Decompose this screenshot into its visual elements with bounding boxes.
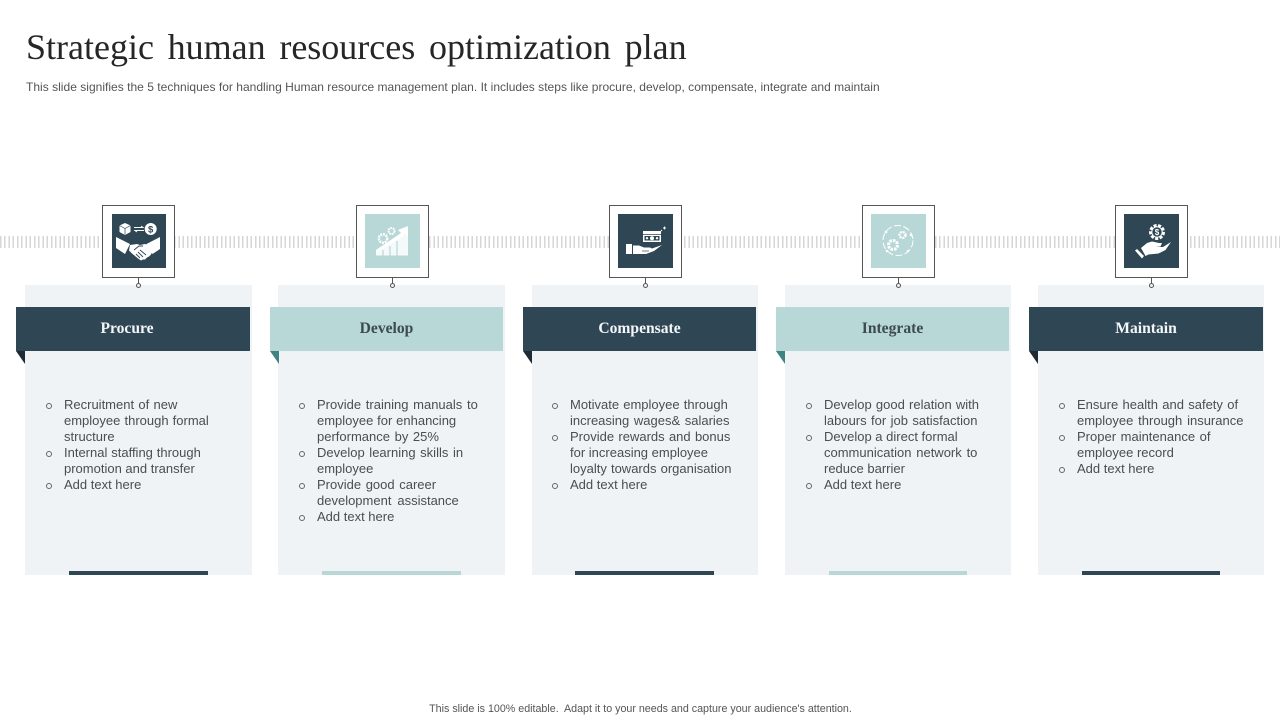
connector (1151, 278, 1152, 283)
bullet list: employee record (1077, 445, 1174, 460)
bullet list: increasing wages& salaries (570, 413, 730, 428)
accent bar (829, 571, 967, 575)
ribbon fold (270, 351, 279, 364)
ribbon fold (1029, 351, 1038, 364)
footer note: This slide is 100% editable. Adapt it to your needs and capture your audience's attention. (429, 703, 852, 715)
heading: Maintain (1029, 307, 1263, 351)
bullet list: Ensure health and safety of (1077, 397, 1238, 412)
bullet list: Add text here (570, 477, 647, 492)
icon: growth chart with gears (356, 205, 429, 278)
panel: maintain (1029, 205, 1264, 575)
bullet list: Develop a direct formal (824, 429, 958, 444)
ribbon fold (523, 351, 532, 364)
heading: Maintain: Maintain (1115, 320, 1177, 337)
bullet list: Add text here (317, 509, 394, 524)
ribbon fold (16, 351, 25, 364)
subtitle: This slide signifies the 5 techniques for handling Human resource management plan. It includes steps like procure, develop, compensate, integrate and maintain (26, 80, 880, 94)
heading: Integrate (776, 307, 1009, 351)
bullet list: Develop good relation with (824, 397, 979, 412)
bullet list: employee through formal (64, 413, 209, 428)
heading: Compensate (523, 307, 756, 351)
card background (1038, 285, 1264, 575)
bullet list: loyalty towards organisation (570, 461, 731, 476)
heading: Develop (270, 307, 503, 351)
connector (138, 278, 139, 283)
bullet list: for increasing employee (570, 445, 708, 460)
card background (532, 285, 758, 575)
bullet list: Add text here (64, 477, 141, 492)
card background (785, 285, 1011, 575)
connector dot (136, 283, 141, 288)
heading: Develop: Develop (360, 320, 413, 337)
bullet list: development assistance (317, 493, 459, 508)
bullet list (806, 397, 979, 492)
bullet list: promotion and transfer (64, 461, 195, 476)
bullet list: performance by 25% (317, 429, 439, 444)
bullet list: employee for enhancing (317, 413, 456, 428)
bullet list: Add text here (1077, 461, 1154, 476)
ribbon fold (776, 351, 785, 364)
bullet list (1059, 397, 1243, 476)
bullet list: Provide rewards and bonus (570, 429, 730, 444)
dashed timeline strip (0, 236, 1280, 248)
card background (278, 285, 505, 575)
icon: hand with gear: $ (1155, 228, 1160, 237)
bullet list: Provide good career (317, 477, 436, 492)
panel: develop (270, 205, 505, 575)
panel: compensate (523, 205, 758, 575)
heading: Compensate: Compensate (598, 320, 681, 337)
bullet list (552, 397, 731, 492)
icon: handshake (102, 205, 175, 278)
bullet list: reduce barrier (824, 461, 905, 476)
accent bar (69, 571, 208, 575)
connector dot (643, 283, 648, 288)
bullet list: labours for job satisfaction (824, 413, 977, 428)
bullet list: Recruitment of new (64, 397, 177, 412)
bullet list: Motivate employee through (570, 397, 728, 412)
icon: gears in circle (862, 205, 935, 278)
connector dot (390, 283, 395, 288)
card background (25, 285, 252, 575)
title: Strategic human resources optimization plan (26, 27, 687, 67)
accent bar (322, 571, 461, 575)
heading: Procure: Procure (100, 320, 154, 337)
panel: procure (16, 205, 252, 575)
heading: Integrate: Integrate (862, 320, 923, 337)
connector (898, 278, 899, 283)
bullet list: communication network to (824, 445, 977, 460)
icon: hand with gear (1115, 205, 1188, 278)
icon: handshake: $ (148, 224, 154, 236)
bullet list (46, 397, 209, 492)
bullet list: Internal staffing through (64, 445, 201, 460)
bullet list: Provide training manuals to (317, 397, 478, 412)
accent bar (1082, 571, 1220, 575)
connector (392, 278, 393, 283)
heading: Procure (16, 307, 250, 351)
bullet list: Proper maintenance of (1077, 429, 1211, 444)
bullet list: employee (317, 461, 373, 476)
accent bar (575, 571, 714, 575)
bullet list: structure (64, 429, 115, 444)
bullet list: employee through insurance (1077, 413, 1243, 428)
connector dot (896, 283, 901, 288)
icon: hand with money (609, 205, 682, 278)
connector (645, 278, 646, 283)
bullet list: Add text here (824, 477, 901, 492)
bullet list: Develop learning skills in (317, 445, 463, 460)
panel: integrate (776, 205, 1011, 575)
bullet list (299, 397, 478, 524)
connector dot (1149, 283, 1154, 288)
